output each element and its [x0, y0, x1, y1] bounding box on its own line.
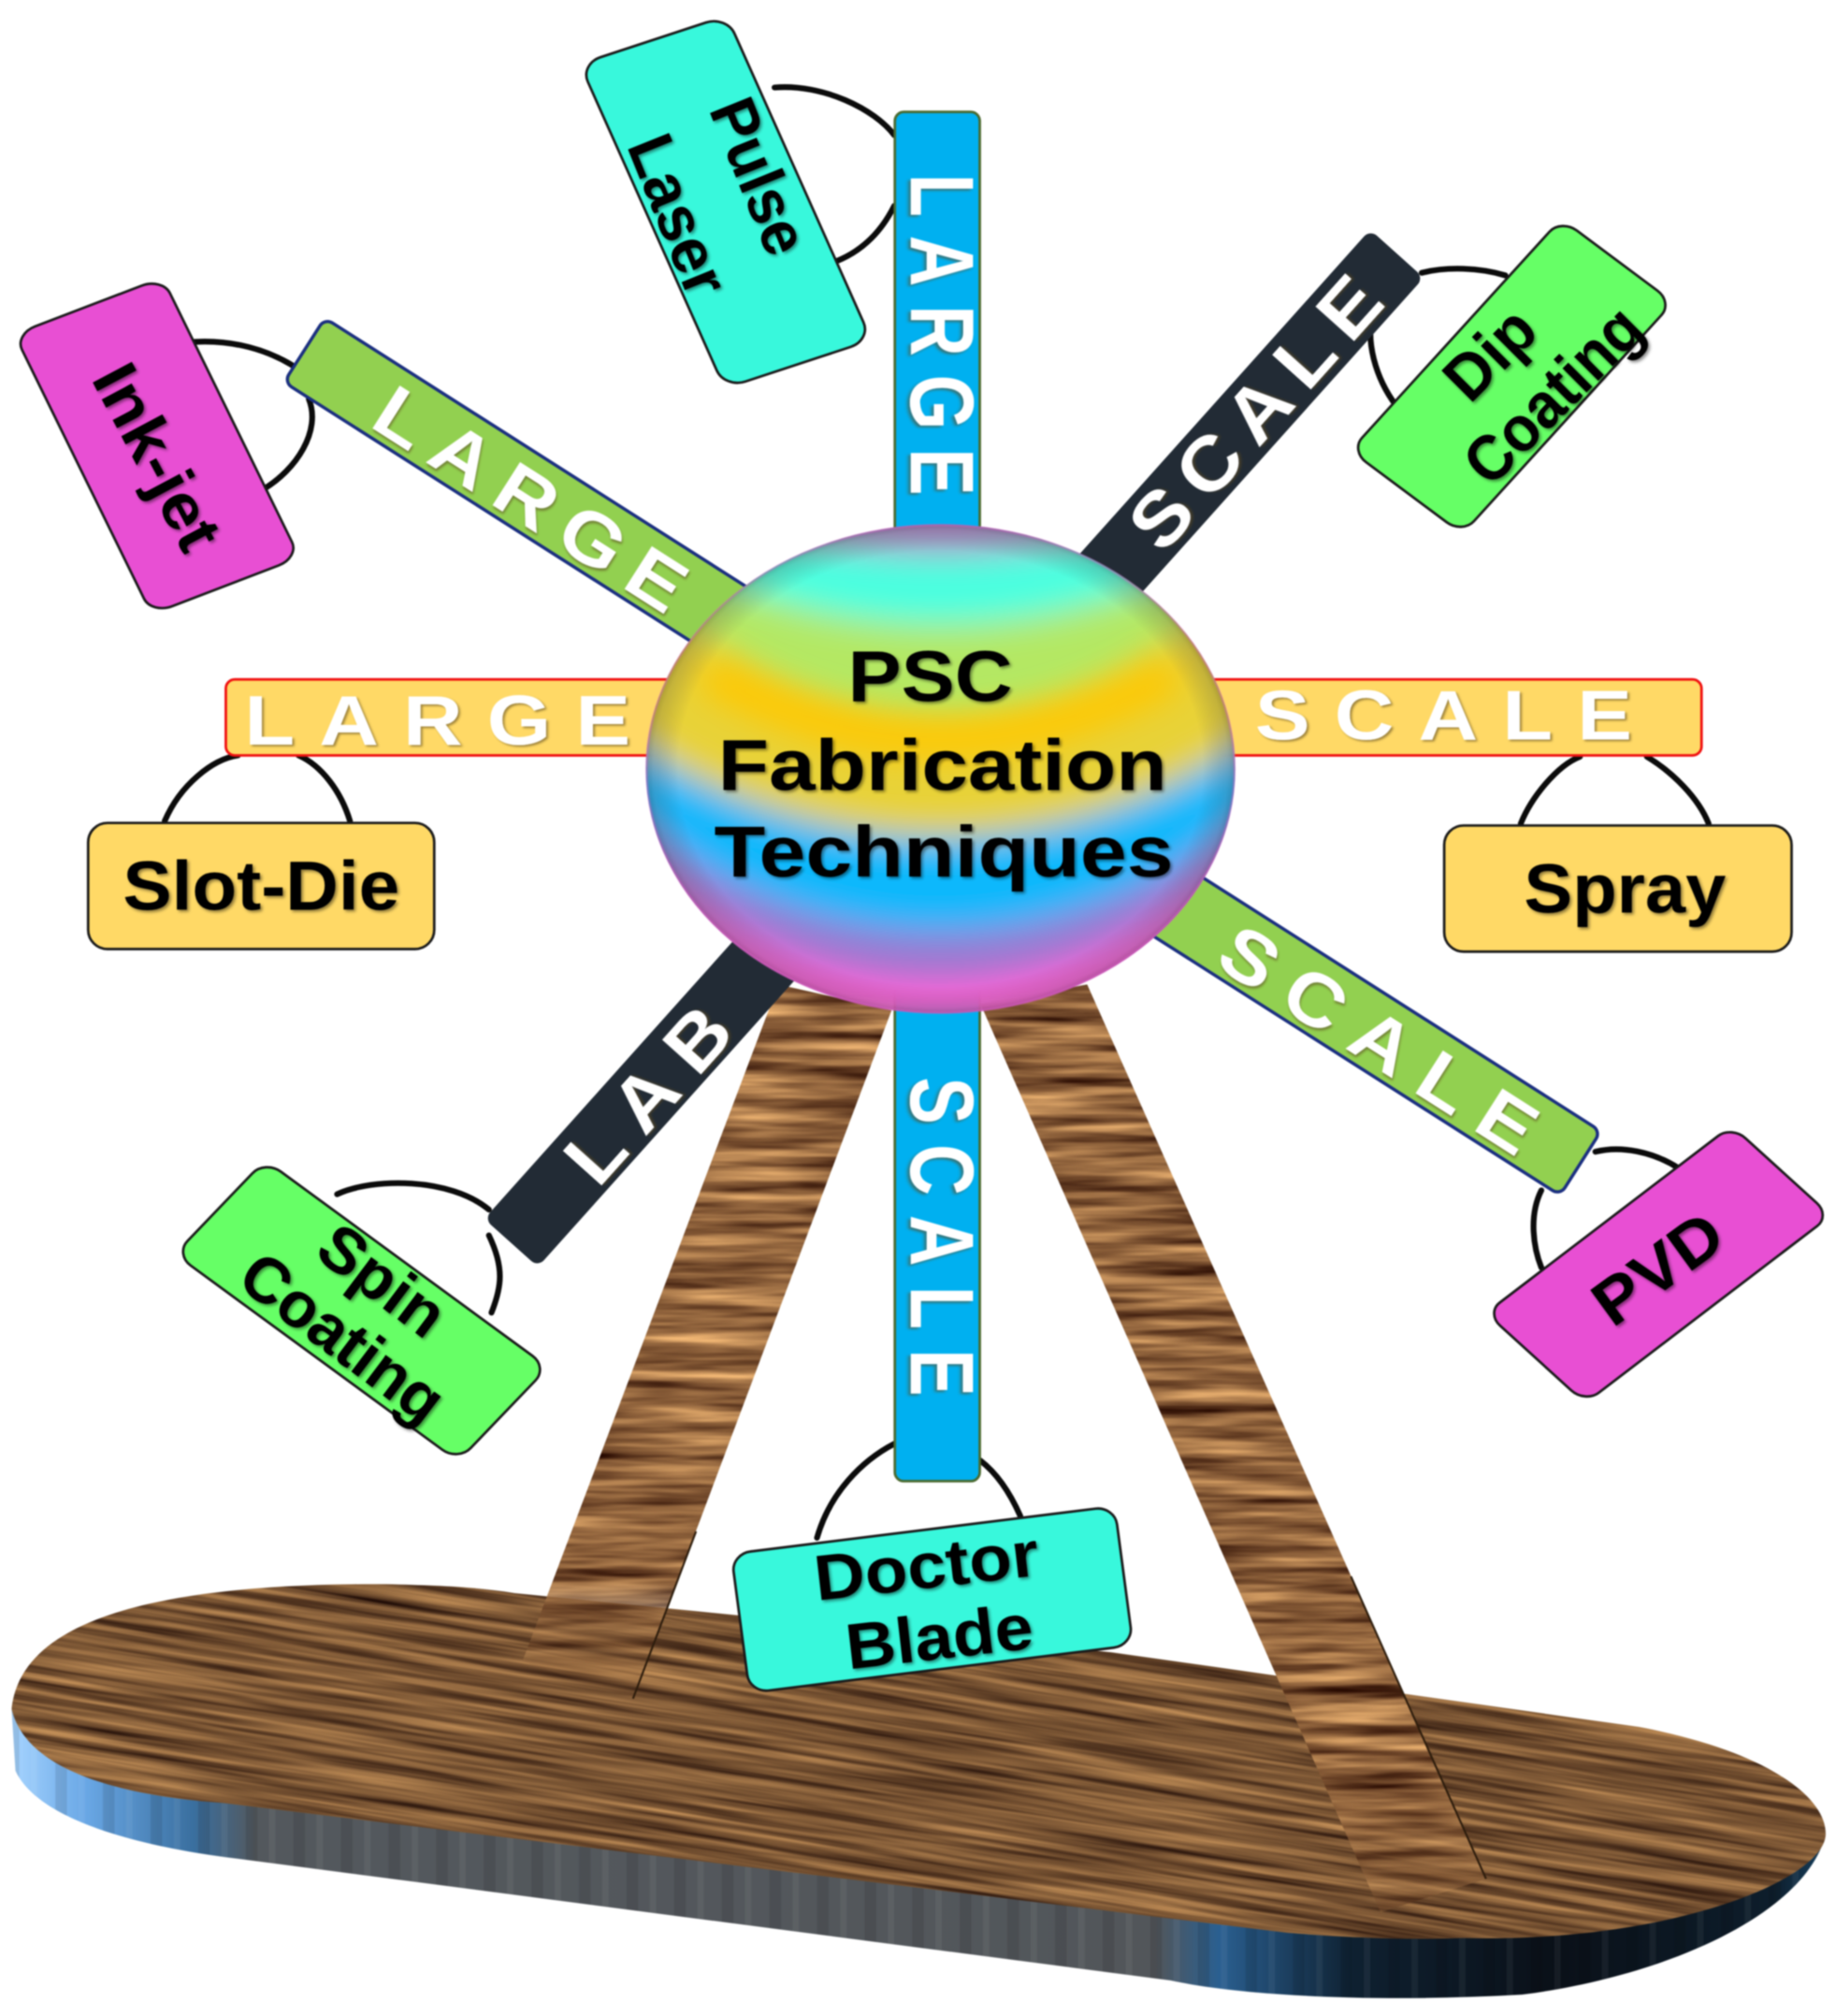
handle: pulse laser [774, 87, 894, 261]
label: Ink-jet: Ink-jet [79, 351, 236, 562]
bar text: SCALE bottom: SCALE [891, 1077, 990, 1397]
title: PSC Fabrication Techniques [714, 637, 1174, 892]
label: Spin Coating: Spin [304, 1209, 460, 1352]
label: Spray [1444, 825, 1792, 951]
label: Slot-Die [88, 823, 434, 949]
label: Pulse Laser [580, 16, 872, 388]
label: Doctor Blade: Blade [842, 1590, 1036, 1683]
handle: doctor blade [817, 1443, 1020, 1538]
handle: dip coating [1370, 268, 1505, 405]
bar text: SCALE right: SCALE [1255, 676, 1632, 755]
bar: diagonal green [284, 318, 1601, 1196]
label: Dip Coating: Coating [1449, 291, 1656, 499]
handle: ink-jet [188, 341, 312, 489]
bar: vertical blue [895, 112, 980, 1481]
label: PVD: PVD [1579, 1197, 1737, 1340]
bar text: LARGE diagonal: LARGE [359, 369, 702, 629]
bar: horizontal yellow [225, 679, 1701, 755]
wooden leg left [579, 1158, 708, 1699]
wooden base [11, 1660, 1826, 1998]
label: Spray: Spray [1524, 849, 1726, 927]
bar text: SCALE dark diagonal: SCALE [1111, 258, 1399, 566]
bar: diagonal dark [484, 229, 1424, 1267]
label: Doctor Blade [731, 1506, 1133, 1693]
title: PSC Fabrication Techniques: Techniques [714, 812, 1174, 892]
label: Ink-jet [14, 278, 299, 614]
label: Doctor Blade: Doctor [810, 1517, 1042, 1615]
title: PSC Fabrication Techniques: PSC [848, 637, 1013, 718]
label: Pulse Laser: Pulse [696, 88, 823, 265]
wooden leg right [1093, 1158, 1486, 1878]
handle: spin coating [337, 1183, 499, 1313]
label: Spin Coating [175, 1160, 548, 1461]
label: PVD [1486, 1125, 1830, 1403]
bar text: SCALE diagonal: SCALE [1205, 907, 1553, 1171]
label: Pulse Laser: Laser [614, 123, 743, 306]
title: PSC Fabrication Techniques: Fabrication [718, 726, 1167, 806]
label: Dip Coating: Dip [1429, 293, 1551, 414]
label: Slot-Die: Slot-Die [123, 848, 399, 925]
central sphere [644, 523, 1236, 1015]
bar text: LARGE top: LARGE [891, 174, 990, 496]
bar text: LAB dark diagonal: LAB [546, 988, 749, 1200]
handle: slot-die [165, 755, 350, 821]
handle: PVD [1534, 1150, 1679, 1268]
label: Dip Coating [1351, 219, 1673, 534]
bar text: LARGE left: LARGE [244, 682, 630, 760]
handle: spray [1521, 757, 1709, 823]
label: Spin Coating: Coating [226, 1238, 459, 1438]
